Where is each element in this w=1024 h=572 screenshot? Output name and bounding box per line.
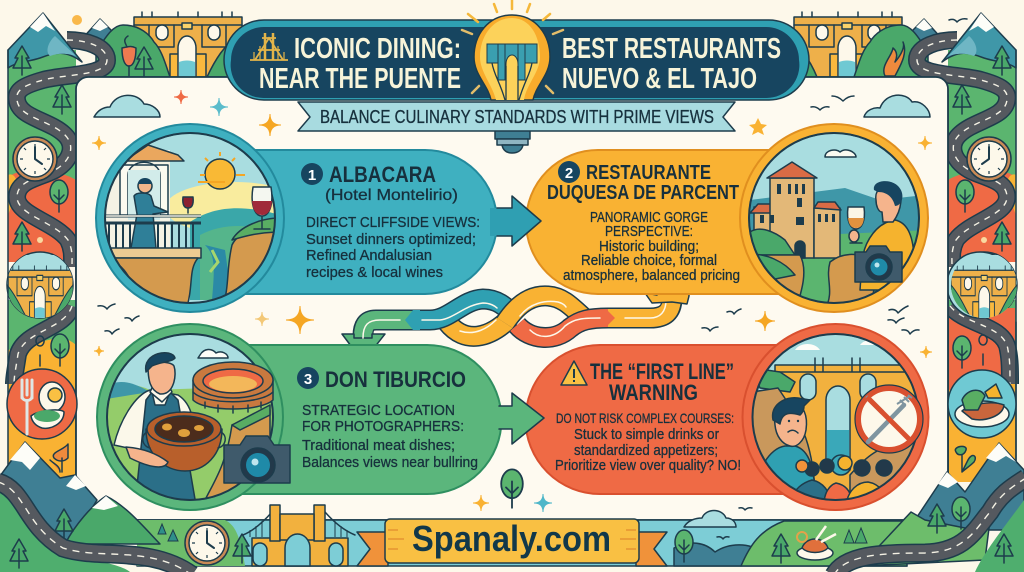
icon: golden bridge [250, 33, 288, 60]
icon: bottom round tree [675, 530, 693, 562]
icon: bottom pine tree [233, 534, 251, 563]
icon: cloud right [864, 95, 930, 117]
icon: wine glass [252, 187, 272, 229]
step 4 heading: WARNING [609, 380, 698, 405]
title: right: NUEVO & EL TAJO [562, 63, 757, 95]
pill body [526, 345, 795, 494]
step 2 body: PANORAMIC GORGE [590, 209, 708, 226]
step 2 heading [547, 162, 739, 204]
step 2 body: PERSPECTIVE: [605, 223, 693, 240]
title: left: ICONIC DINING: [294, 33, 461, 65]
step 4 body: Stuck to simple drinks or [574, 426, 719, 443]
step 1 body: recipes & local wines [306, 264, 443, 281]
step 3 heading: DON TIBURCIO [325, 367, 466, 392]
step 1 badge [301, 163, 323, 185]
step 3 body: Traditional meat dishes; [302, 437, 455, 454]
step 3 body [302, 402, 478, 471]
icon: right flower sprig [955, 446, 975, 472]
step 4 body: standardized appetizers; [574, 442, 718, 459]
step 2 body: Historic building; [599, 238, 699, 255]
title banner [224, 20, 809, 100]
ribbon tail left [357, 532, 388, 566]
icon: wine glass [848, 207, 864, 243]
connector ribbon between steps [342, 283, 689, 362]
step 4 body: Prioritize view over quality? NO! [555, 457, 741, 474]
birds [98, 19, 967, 539]
icon: left flower sprig [50, 444, 68, 472]
subtitle ribbon: BALANCE CULINARY STANDARDS WITH PRIME VIEWS [320, 107, 714, 127]
step 3 body: Balances views near bullring [302, 454, 478, 471]
step 1 body: Sunset dinners optimized; [306, 231, 476, 248]
step 1 body [306, 214, 480, 281]
step 3 badge [297, 367, 319, 389]
illustration: balcony with sunset and wine [96, 124, 305, 312]
icon: camera [855, 246, 902, 282]
site name: Spanaly.com [412, 518, 611, 559]
icon: pot of stew [126, 412, 225, 471]
icon: bridge top left [134, 12, 242, 77]
step 4 body [555, 410, 741, 474]
step 3 body: FOR PHOTOGRAPHERS: [302, 418, 464, 435]
icon: light bulb with bridge [462, 0, 563, 100]
panel: step 1 Albacara [96, 124, 497, 312]
step 2 badge [558, 161, 580, 183]
panel: step 4 First Line warning [526, 324, 928, 510]
icon: sun dot [72, 15, 82, 25]
title: right: BEST RESTAURANTS [562, 33, 781, 65]
right mountains and road corner [834, 443, 1024, 572]
step 2 body [563, 209, 740, 284]
step 2 heading: RESTAURANTE [586, 162, 711, 184]
step 2 body: Reliable choice, formal [581, 252, 717, 269]
footer banner [357, 518, 667, 566]
step 2 badge: 2 [565, 165, 573, 182]
step 1 body: DIRECT CLIFFSIDE VIEWS: [306, 214, 480, 231]
arrow: step 1 to step 2 [490, 196, 541, 246]
decorative stars and sparkles [92, 90, 932, 512]
pill body [526, 150, 790, 294]
title: left: NEAR THE PUENTE [259, 63, 461, 95]
icon: left food circle with fork [7, 369, 77, 439]
illustration: historic building with photographer [740, 124, 930, 312]
icon: green hill with flame [779, 34, 905, 77]
left mountains and road corner [0, 442, 192, 572]
pill body [235, 345, 502, 494]
title: left [259, 33, 461, 95]
step 1 body: Refined Andalusian [306, 247, 432, 264]
title: right [562, 33, 781, 95]
step 2 heading: DUQUESA DE PARCENT [547, 182, 739, 204]
icon: bridge top right [794, 12, 902, 77]
ribbon tail right [636, 532, 667, 566]
icon: center tree [501, 469, 523, 508]
icon: bottom bridge [243, 505, 355, 566]
icon: left tree and spoon [36, 334, 69, 366]
step 1 subheading: (Hotel Montelirio) [325, 187, 458, 204]
icon: bullring [193, 362, 273, 413]
step 4 heading [590, 359, 734, 405]
subtitle ribbon [298, 102, 735, 131]
illustration: chef with pot, bullring and camera [97, 324, 300, 510]
pill body [235, 150, 497, 294]
icon: camera [224, 436, 290, 483]
icon: no cutlery sign [855, 385, 923, 453]
panel: step 3 Don Tiburcio [97, 324, 502, 510]
icon: right food circle with steak [948, 370, 1016, 438]
recolour strip details on right side [947, 252, 1017, 482]
illustration: sad visitor at bridge with no-cutlery sign [742, 324, 928, 510]
bulb base [495, 130, 530, 153]
arrow: step 3 to step 4 [490, 393, 544, 444]
inner content panel [76, 77, 948, 520]
icon: bottom plate of food [797, 526, 836, 560]
step 1 badge: 1 [308, 167, 316, 184]
icon: cloud left [94, 95, 160, 117]
step 3 body: STRATEGIC LOCATION [302, 402, 455, 419]
frame: left decorative strip with road, clock, bridge [7, 13, 170, 480]
panel: step 2 Restaurante Duquesa de Parcent [526, 124, 930, 312]
icon: green hill with wine glass [122, 34, 245, 77]
step 3 badge: 3 [304, 371, 312, 388]
step 2 body: atmosphere, balanced pricing [563, 267, 740, 284]
icon: bottom clock [185, 521, 229, 565]
step 4 body: DO NOT RISK COMPLEX COURSES: [556, 410, 734, 426]
bottom strip scenery [137, 520, 907, 566]
step 1 heading: ALBACARA [329, 162, 436, 187]
icon: cloud bottom [684, 510, 736, 527]
step 4 heading: THE “FIRST LINE” [590, 359, 734, 384]
frame: right decorative strip with road, clock, bridge [854, 13, 1017, 480]
icon: warning triangle [561, 361, 587, 385]
